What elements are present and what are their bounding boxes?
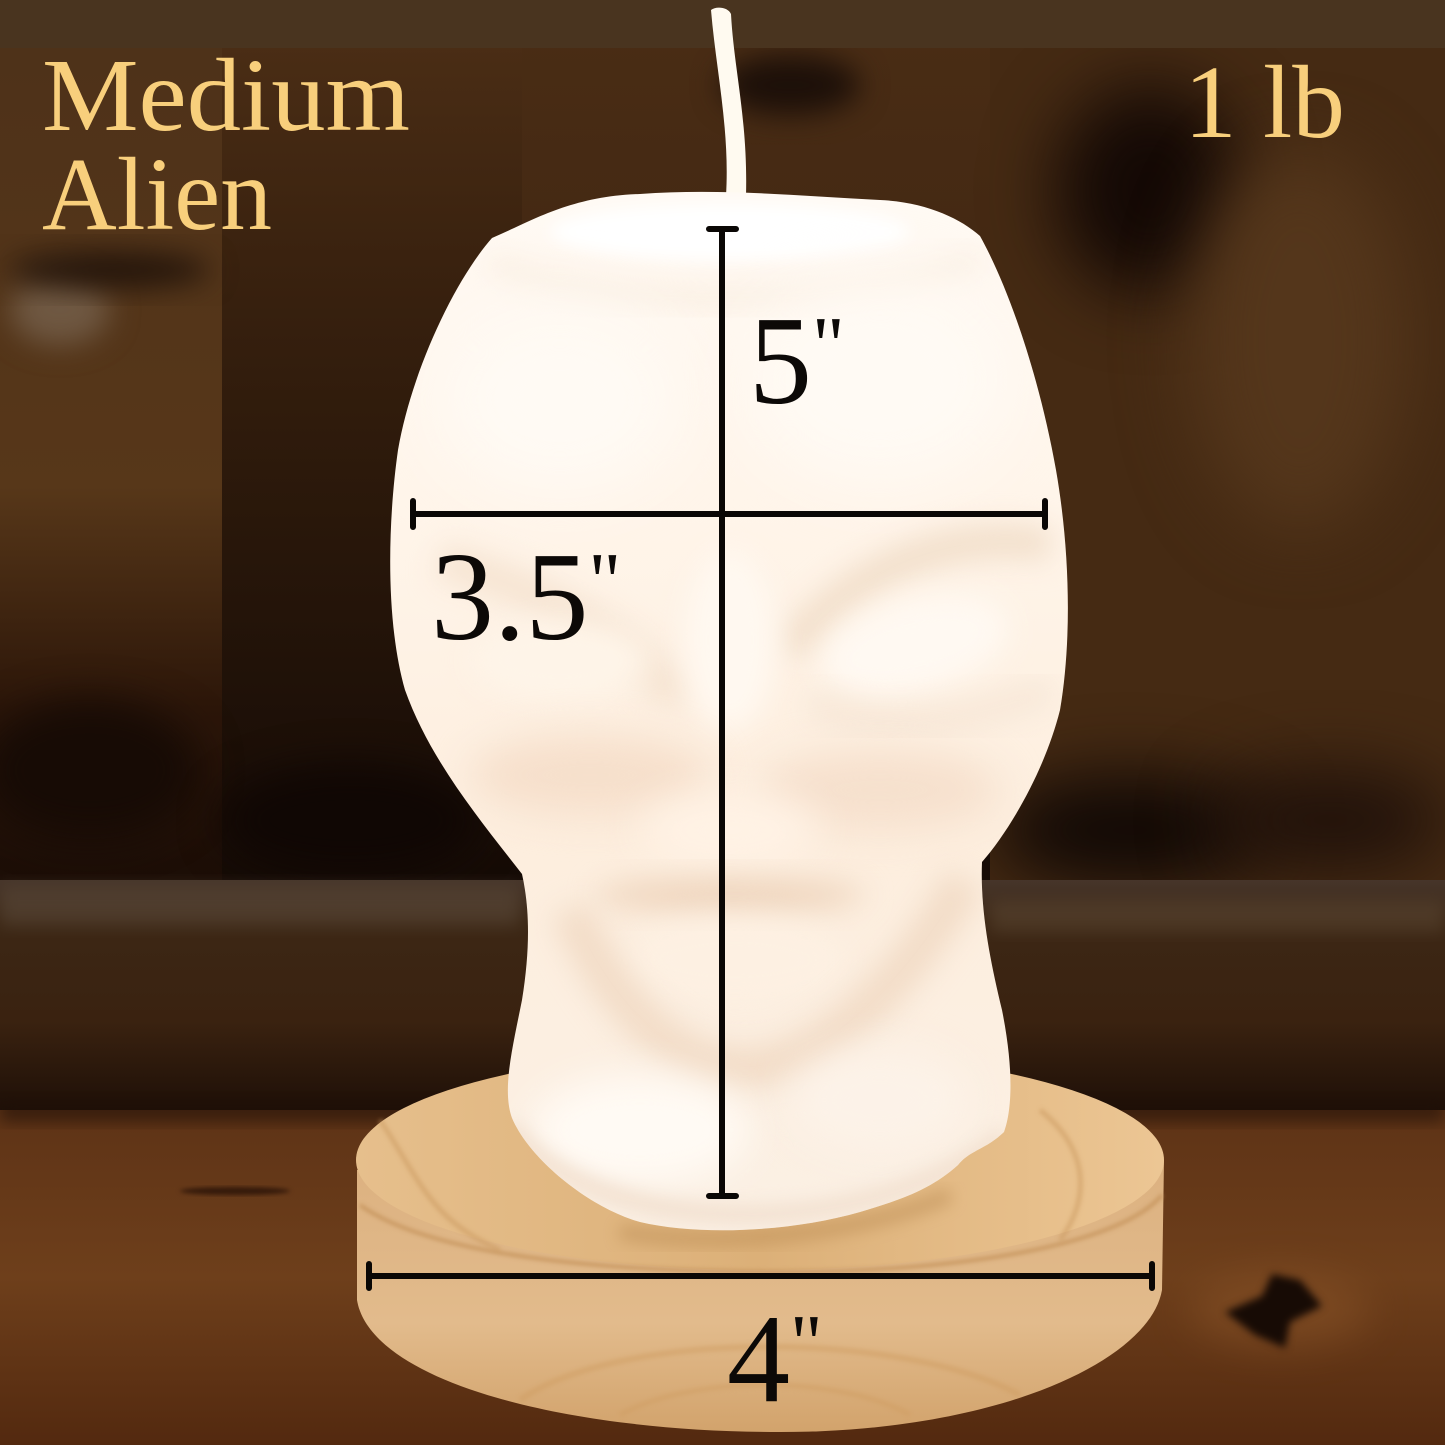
wick (711, 8, 746, 196)
head width measurement: 3.5 inches: " (588, 538, 621, 626)
base width measurement: 4 inches: " (790, 1300, 823, 1388)
title: Medium Alien: Alien (42, 137, 272, 252)
title: Medium Alien: Medium (42, 38, 410, 153)
weight label: 1 lb: 1 lb (1184, 45, 1345, 160)
wooden base (356, 1050, 1164, 1432)
candle: alien head (390, 192, 1068, 1230)
height measurement: 5 inches: 5 (749, 292, 812, 431)
base width measurement: 4 inches (369, 1264, 1152, 1429)
title: Medium Alien (42, 38, 410, 252)
height measurement: 5 inches: " (812, 302, 845, 390)
height measurement: 5 inches (709, 229, 845, 1196)
base width measurement: 4 inches: 4 (727, 1290, 790, 1429)
head width measurement: 3.5 inches (413, 501, 1045, 667)
head width measurement: 3.5 inches: 3.5 (431, 528, 588, 667)
